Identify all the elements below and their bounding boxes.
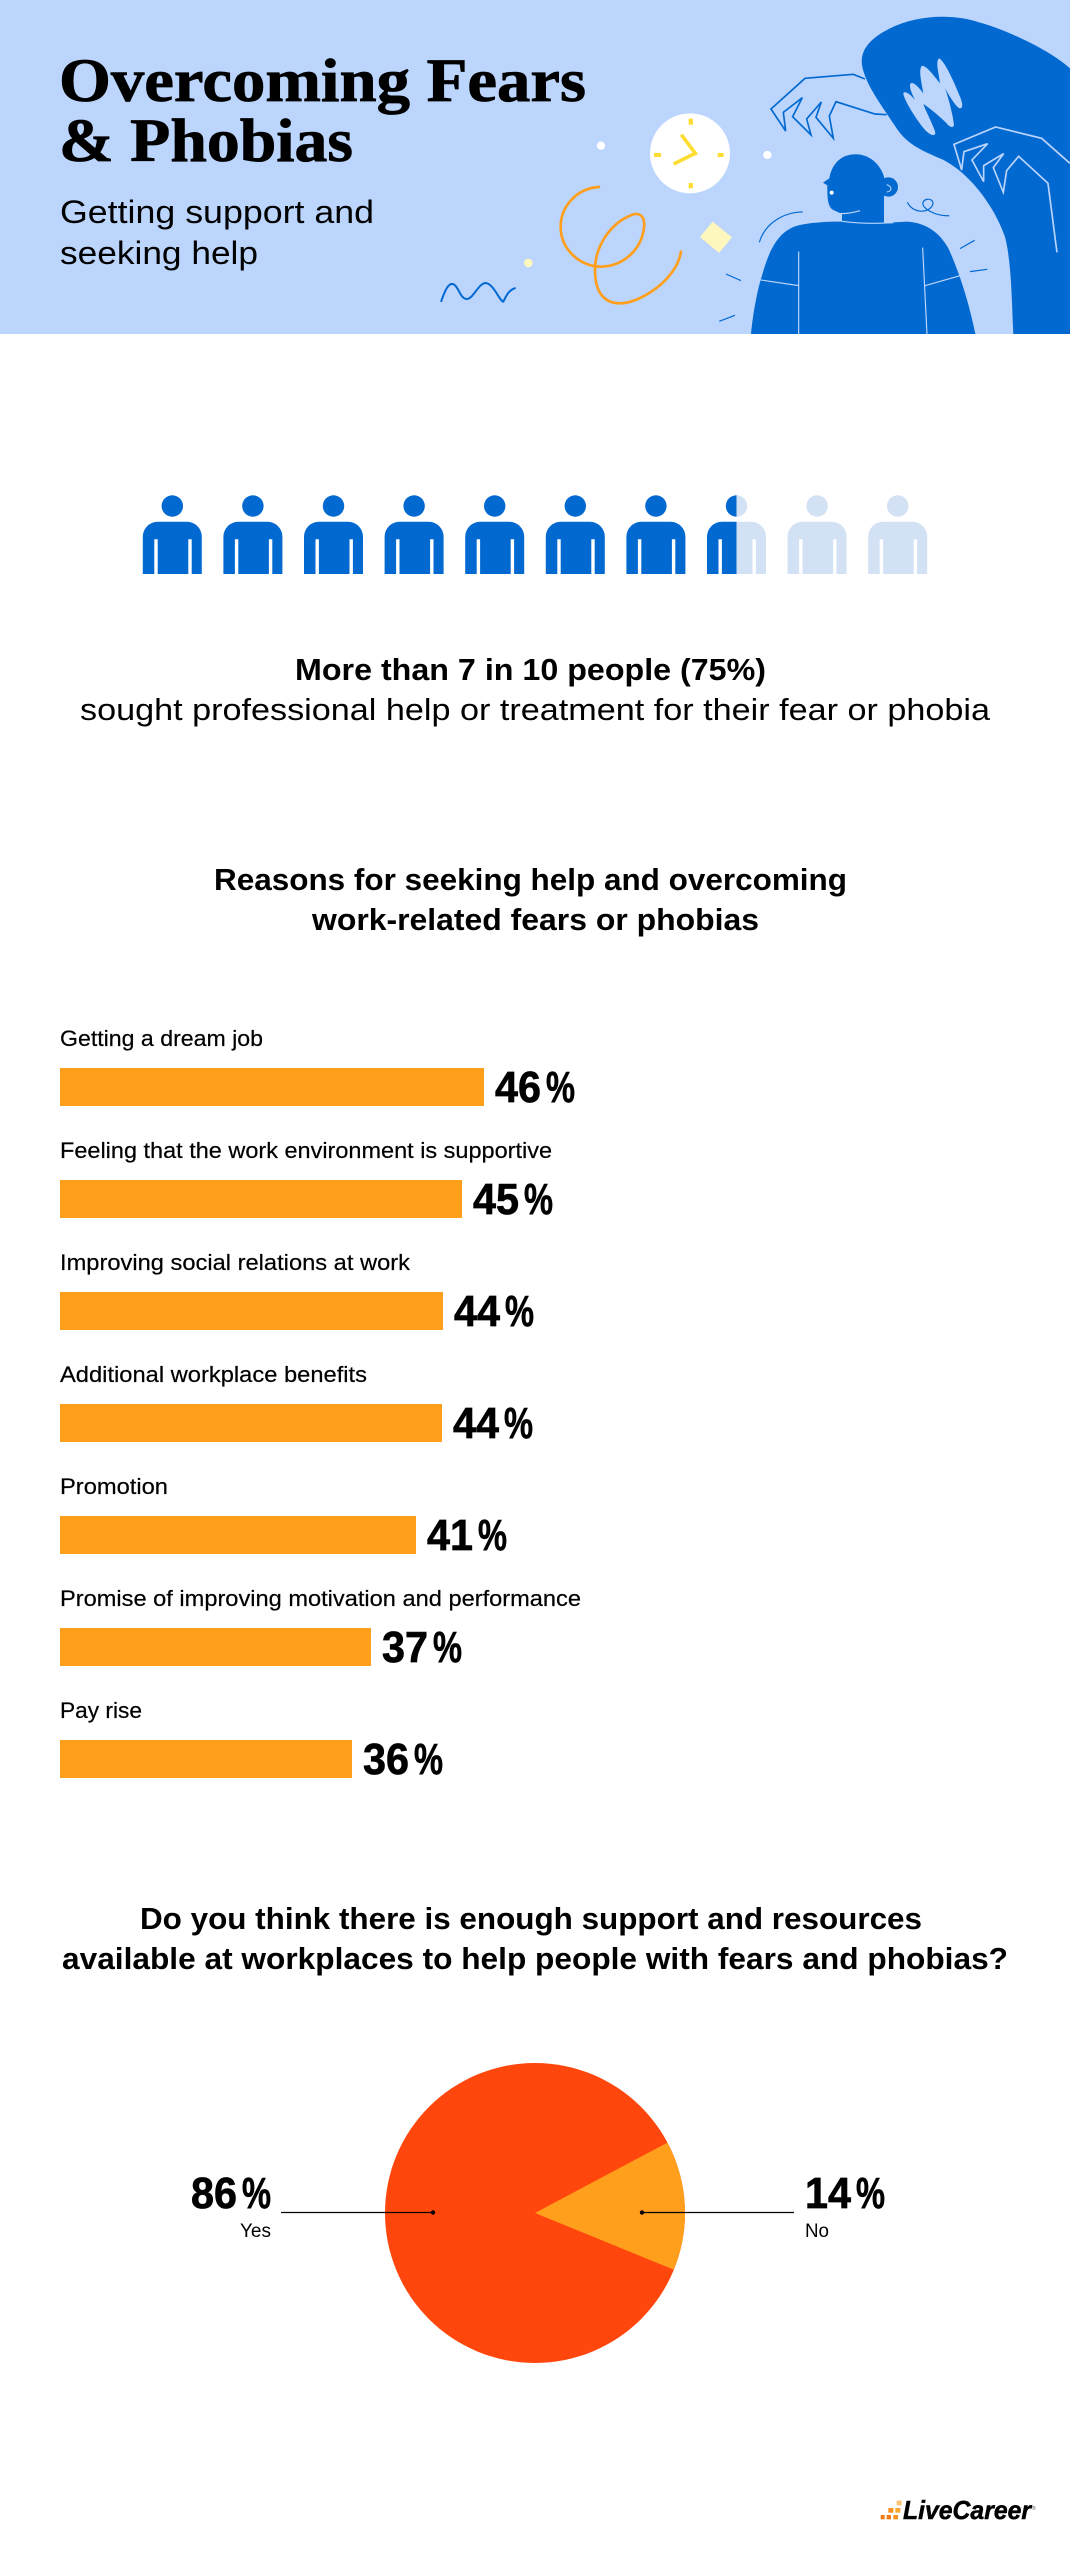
callout: no [640,2169,885,2242]
bar: promotion [60,1474,507,1560]
bar: workplace benefits [60,1362,533,1448]
statistic text [80,652,991,727]
pie chart: yes 86% / no 14% [191,2063,885,2363]
callout: no: 14 [805,2169,851,2218]
bar: motivation and performance: 37 [382,1623,428,1672]
bar: getting a dream job: Getting a dream job [60,1026,263,1051]
logo: LiveCareer: LiveCareer [903,2495,1033,2525]
bar: social relations: Improving social relations at work [60,1250,411,1275]
bar: motivation and performance: Promise of improving motivation and performance [60,1586,581,1611]
illustration: shadow monster [771,17,1070,334]
bar: promotion: Promotion [60,1474,168,1499]
heading: workplace support question: Do you think there is enough support and resources [140,1901,922,1936]
bar: workplace benefits: % [504,1399,533,1448]
header banner [0,0,1070,334]
bar: supportive environment: Feeling that the work environment is supportive [60,1138,552,1163]
callout: no: % [856,2169,885,2218]
logo: LiveCareer: ® [1032,2505,1036,2512]
bar: supportive environment: 45 [473,1175,519,1224]
doodles: dots, scribbles and diamond [441,141,741,321]
bar: promotion: 41 [427,1511,473,1560]
callout: yes [191,2169,435,2242]
heading: reasons [214,862,847,937]
bar: getting a dream job [60,1026,575,1112]
bar: motivation and performance [60,1586,581,1672]
callout: yes: Yes [240,2221,271,2242]
title [59,48,586,175]
bar: workplace benefits: Additional workplace benefits [60,1362,367,1387]
heading: reasons: Reasons for seeking help and overcoming [214,862,847,897]
bar: social relations: % [505,1287,534,1336]
heading: workplace support question: available at workplaces to help people with fears and phobias? [62,1941,1008,1976]
bar: getting a dream job: % [546,1063,575,1112]
illustration: person [751,151,987,334]
callout: yes: 86 [191,2169,237,2218]
bar: promotion: % [478,1511,507,1560]
callout: no: No [805,2221,829,2242]
title: Overcoming Fears [59,48,586,115]
bar: pay rise: % [414,1735,443,1784]
title: & Phobias [59,108,353,175]
pictogram: 7.5 of 10 people [143,495,927,574]
bar: social relations: 44 [454,1287,500,1336]
subtitle [60,194,374,271]
subtitle: Getting support and [60,194,374,230]
statistic text: More than 7 in 10 people (75%) [295,652,766,687]
bar: pay rise: Pay rise [60,1698,142,1723]
bar: motivation and performance: % [433,1623,462,1672]
icon: clock [650,113,730,193]
bar: supportive environment [60,1138,553,1224]
statistic text: sought professional help or treatment for their fear or phobia [80,692,991,727]
bar: pay rise [60,1698,443,1784]
bar: getting a dream job: 46 [495,1063,541,1112]
subtitle: seeking help [60,235,258,271]
bar chart: reasons [60,1026,581,1784]
bar: workplace benefits: 44 [453,1399,499,1448]
callout: yes: % [242,2169,271,2218]
bar: pay rise: 36 [363,1735,409,1784]
heading: reasons: work-related fears or phobias [311,902,759,937]
bar: supportive environment: % [524,1175,553,1224]
heading: workplace support question [62,1901,1008,1976]
bar: social relations [60,1250,534,1336]
